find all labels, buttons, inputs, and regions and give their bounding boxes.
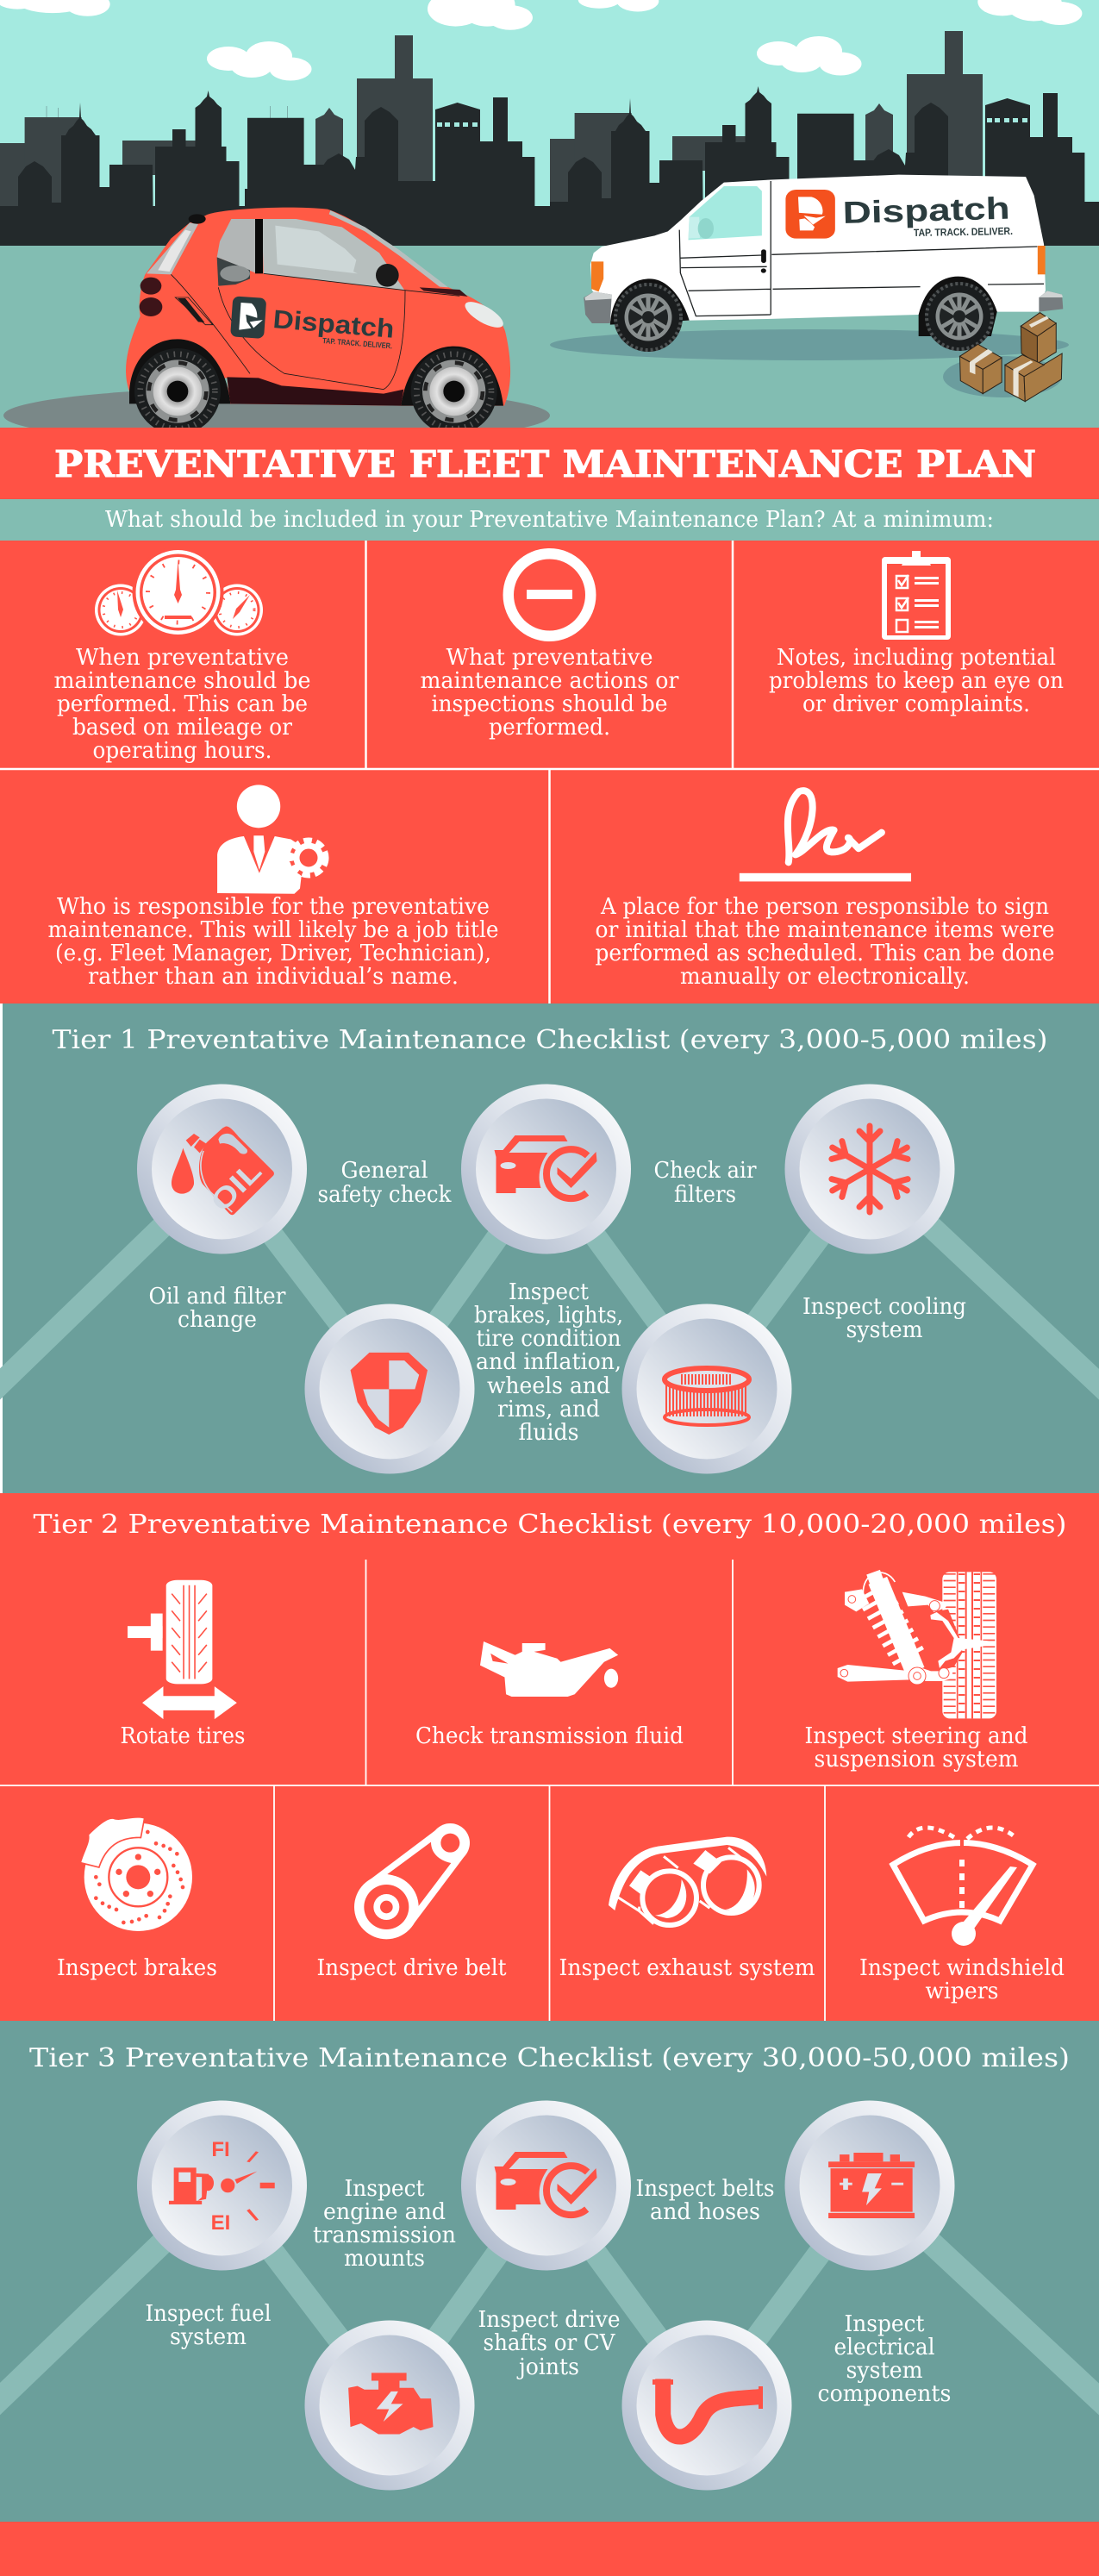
text: who (48, 894, 498, 990)
label: brakes lights (474, 1279, 623, 1446)
label: wipers: Inspect windshield (859, 1955, 1065, 1981)
label: rotate tires: Rotate tires (121, 1723, 245, 1749)
label: engine mounts: engine and (323, 2199, 446, 2225)
connector lines (0, 1169, 1099, 1394)
text: what: performed. (489, 715, 610, 741)
label: fuel system (145, 2301, 271, 2350)
clouds (0, 0, 1082, 81)
label: drive shafts: shafts or CV (483, 2330, 616, 2356)
text: who: (e.g. Fleet Manager, Driver, Technician), (55, 941, 491, 966)
label: brakes lights: fluids (519, 1420, 579, 1446)
circle: car check (461, 1085, 631, 1254)
tier 1 heading: Tier 1 Preventative Maintenance Checklist (every 3,000-5,000 miles) (52, 1025, 1048, 1055)
circle: fuel gauge: FI (211, 2138, 230, 2161)
title banner (0, 428, 1099, 499)
van logo text: Dispatch (842, 191, 1010, 230)
text: when (53, 645, 310, 764)
label: electrical (817, 2311, 952, 2407)
icon: gauges (95, 547, 263, 638)
label: wipers (859, 1955, 1065, 2004)
skyline back buildings (0, 35, 433, 238)
label: brakes lights: Inspect (509, 1279, 590, 1305)
subtitle band: What should be included in your Preventative Maintenance Plan? At a minimum: (105, 507, 994, 533)
circle: fuel gauge (137, 2100, 307, 2271)
label: belts and hoses: Inspect belts (636, 2176, 774, 2202)
text: what (421, 645, 679, 741)
panel: tier 2 checklist (0, 1493, 1099, 2021)
label: air filters: filters (674, 1182, 736, 1208)
label: belts and hoses: and hoses (650, 2199, 760, 2225)
icon: transmission oil can (480, 1641, 618, 1697)
text: what: inspections should be (431, 691, 667, 717)
text: what: What preventative (446, 645, 653, 671)
circle: battery (784, 2100, 955, 2271)
icon: drive belt (354, 1823, 470, 1939)
label: drive shafts: joints (516, 2354, 579, 2380)
hero illustration: city, car and van (0, 0, 1099, 444)
tier 3 heading: Tier 3 Preventative Maintenance Checklist (every 30,000-50,000 miles) (29, 2043, 1070, 2073)
skyline back buildings right (550, 31, 983, 234)
label: air filters (653, 1158, 757, 1208)
car logo text: TAP. TRACK. DELIVER. (322, 336, 392, 350)
label: air filters: Check air (653, 1158, 757, 1184)
circle: engine (305, 2321, 474, 2490)
label: engine mounts: mounts (344, 2246, 425, 2272)
label: brakes lights: brakes, lights, (474, 1303, 623, 1329)
title banner: PREVENTATIVE FLEET MAINTENANCE PLAN (54, 443, 1036, 485)
label: oil and filter: change (178, 1307, 257, 1333)
van shadow (550, 329, 1069, 360)
label: electrical: electrical (834, 2335, 934, 2360)
label: steering suspension: Inspect steering and (805, 1723, 1027, 1749)
label: brakes lights: rims, and (497, 1397, 600, 1422)
text: sign (595, 894, 1055, 990)
label: engine mounts: transmission (313, 2223, 456, 2248)
label: engine mounts (313, 2176, 456, 2272)
label: brakes: Inspect brakes (57, 1955, 217, 1981)
text: sign: performed as scheduled. This can be done (595, 941, 1055, 966)
text: sign: manually or electronically. (680, 964, 970, 990)
boxes (959, 313, 1062, 402)
icon: brake disc (81, 1818, 192, 1931)
label: steering suspension: suspension system (814, 1747, 1019, 1773)
panel: tier 1 checklist (0, 1004, 1099, 1493)
label: fuel system: Inspect fuel (145, 2301, 271, 2327)
skyline front buildings (0, 91, 552, 246)
panel: plan requirements grid (0, 541, 1099, 1004)
label: general safety check: safety check (317, 1182, 452, 1208)
text: when: operating hours. (93, 738, 272, 764)
circle: air filter (622, 1304, 791, 1474)
icon: exhaust (609, 1837, 766, 1925)
icon: windshield wiper (893, 1828, 1033, 1946)
subtitle band (0, 499, 1099, 541)
icon: rotate tires (128, 1580, 237, 1719)
text: notes: or driver complaints. (802, 691, 1030, 717)
circle: hose (622, 2321, 791, 2490)
circle: fuel gauge: EI (211, 2211, 230, 2235)
van logo text (842, 191, 1013, 239)
tier 2 heading: Tier 2 Preventative Maintenance Checklist (every 10,000-20,000 miles) (33, 1510, 1067, 1540)
label: brakes lights: and inflation, (476, 1349, 621, 1375)
label: wipers: wipers (926, 1979, 998, 2004)
circle: snowflake (784, 1085, 955, 1254)
text: notes: problems to keep an eye on (769, 668, 1064, 694)
icon: person with gear (217, 785, 328, 894)
label: oil and filter (148, 1284, 286, 1333)
text: when: based on mileage or (72, 715, 293, 741)
circle: oil (137, 1085, 307, 1254)
label: engine mounts: Inspect (345, 2176, 425, 2202)
text: notes (769, 645, 1064, 717)
label: brakes lights: wheels and (487, 1373, 610, 1399)
label: cooling system: Inspect cooling (802, 1294, 966, 1320)
text: who: rather than an individual’s name. (88, 964, 459, 990)
text: notes: Notes, including potential (777, 645, 1056, 671)
label: belts and hoses (636, 2176, 774, 2225)
label: transmission fluid: Check transmission fluid (415, 1723, 684, 1749)
icon: clipboard (882, 551, 951, 640)
label: drive shafts: Inspect drive (478, 2307, 621, 2333)
boxes shadow (943, 356, 1062, 397)
icon: suspension (838, 1570, 996, 1718)
label: drive belt: Inspect drive belt (317, 1955, 507, 1981)
circle: car check (461, 2100, 631, 2271)
label: general safety check (317, 1158, 452, 1208)
text: who: Who is responsible for the preventative (57, 894, 490, 920)
label: steering suspension (805, 1723, 1027, 1773)
text: who: maintenance. This will likely be a job title (48, 917, 498, 943)
label: oil and filter: Oil and filter (148, 1284, 286, 1310)
icon: signature (740, 791, 911, 881)
text: sign: or initial that the maintenance items were (595, 917, 1055, 943)
label: drive shafts (478, 2307, 621, 2380)
connector lines (0, 2185, 1099, 2410)
text: when: When preventative (76, 645, 289, 671)
label: fuel system: system (170, 2324, 247, 2350)
label: general safety check: General (341, 1158, 428, 1184)
circle: shield (305, 1304, 474, 1474)
label: exhaust: Inspect exhaust system (559, 1955, 815, 1981)
label: electrical: Inspect (845, 2311, 925, 2337)
car (126, 208, 510, 435)
van logo text: TAP. TRACK. DELIVER. (914, 225, 1013, 239)
label: electrical: components (817, 2381, 952, 2407)
label: brakes lights: tire condition (476, 1326, 621, 1352)
circle: oil: OIL (205, 1155, 268, 1218)
footer band (0, 2522, 1099, 2576)
car logo text: Dispatch (272, 305, 396, 344)
label: electrical: system (846, 2358, 922, 2384)
panel: tier 3 checklist (0, 2021, 1099, 2522)
label: cooling system (802, 1294, 966, 1343)
text: what: maintenance actions or (421, 668, 679, 694)
text: when: maintenance should be (53, 668, 310, 694)
text: sign: A place for the person responsible to sign (600, 894, 1049, 920)
label: cooling system: system (846, 1317, 922, 1343)
text: when: performed. This can be (57, 691, 308, 717)
icon: no entry symbol (503, 548, 596, 641)
van (584, 175, 1063, 352)
tower windows (437, 118, 1027, 127)
skyline front buildings right (550, 86, 1099, 246)
car shadow (3, 387, 550, 444)
